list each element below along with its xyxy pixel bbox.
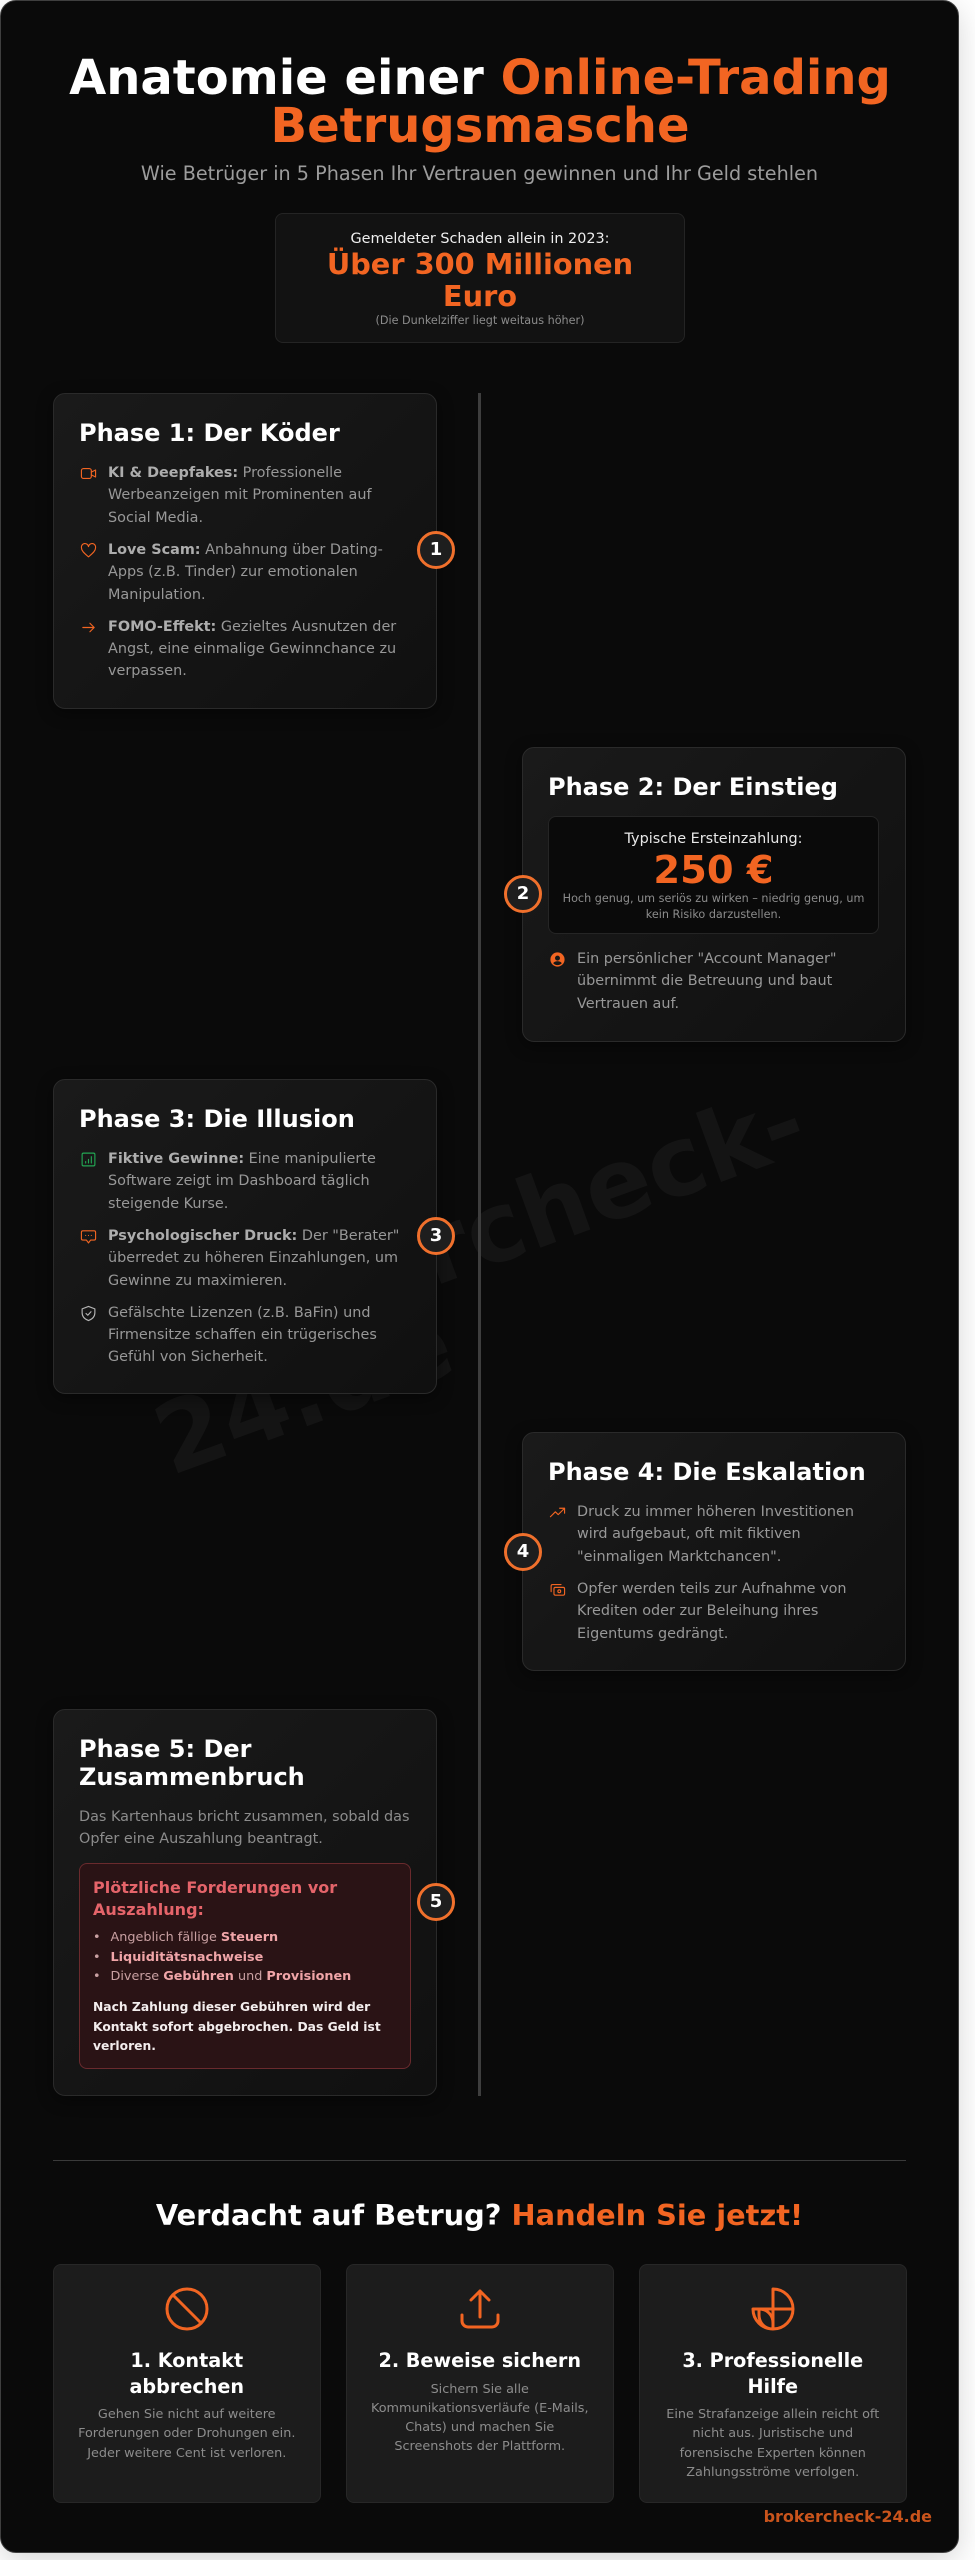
alert list: Liquiditätsnachweise [110,1950,263,1965]
icon: upload [460,2289,500,2328]
item: deepfakes: KI & Deepfakes: Professionelle Werbeanzeigen mit Prominenten auf Social Media. [108,465,372,526]
heading: phase 4: Phase 4: Die Eskalation [548,1458,866,1486]
deposit box: 250 € [653,848,774,893]
stat box: reported damage: Euro [443,278,517,312]
action 1 heading: 1. Kontakt abbrechen [129,2349,244,2398]
item: fake licences: Gefälschte Lizenzen (z.B. BaFin) und Firmensitze schaffen ein trügerisches Gefühl von Sicherheit. [108,1305,377,1365]
alert list: Diverse Gebühren und Provisionen [110,1969,351,1984]
title: Anatomie einer Online-Trading Betrugsmasche [69,50,891,154]
item: fictive profits: Fiktive Gewinne: Eine manipulierte Software zeigt im Dashboard täglich steigende Kurse. [108,1151,376,1212]
text: collapse: Das Kartenhaus bricht zusammen, sobald das Opfer eine Auszahlung beantragt. [79,1809,410,1847]
heading: phase 3: Phase 3: Die Illusion [79,1105,355,1133]
item: fomo: FOMO-Effekt: Gezieltes Ausnutzen der Angst, eine einmalige Gewinnchance zu verpassen. [108,619,396,679]
icon: pie [752,2288,794,2330]
panel: phase 1 [53,393,437,709]
heading: call to action: Verdacht auf Betrug? Handeln Sie jetzt! [156,2198,803,2232]
action card 2 [346,2264,614,2503]
heading: phase 5 [79,1735,305,1791]
alert conclusion: Nach Zahlung dieser Gebühren wird der Kontakt sofort abgebrochen. Das Geld ist verloren. [93,2000,381,2053]
alert list: Angeblich fällige Steuern [110,1930,278,1945]
stat box: reported damage: Über 300 Millionen [327,247,633,281]
stat box: reported damage: (Die Dunkelziffer liegt weitaus höher) [376,314,584,327]
item: loans: Opfer werden teils zur Aufnahme von Krediten oder zur Beleihung ihres Eigentums gedrängt. [577,1581,847,1642]
badge 3: 3 [430,1225,442,1246]
deposit box [548,816,879,934]
badge 3 [417,1217,455,1255]
badge 2: 2 [517,883,529,904]
footer brand: brokercheck-24.de [764,2507,932,2526]
panel: phase 2 [522,747,906,1042]
panel: phase 4 [522,1432,906,1671]
deposit box: kein Risiko darzustellen. [646,908,781,921]
item: love scam: Love Scam: Anbahnung über Dating-Apps (z.B. Tinder) zur emotionalen Manipulation. [108,542,383,603]
alert heading: Plötzliche Forderungen vor Auszahlung: [93,1878,337,1919]
watermark: brokercheck- [110,1064,820,1415]
item: account manager: Ein persönlicher "Account Manager" übernimmt die Betreuung und baut Vertrauen auf. [577,951,836,1012]
badge 4: 4 [517,1541,529,1562]
heading: phase 2: Phase 2: Der Einstieg [548,773,838,801]
panel: phase 5 [53,1709,437,2096]
heading: phase 5: Phase 5: Der [79,1735,251,1763]
alert box [79,1863,411,2069]
badge 2 [504,875,542,913]
timeline line [478,393,481,2096]
panel: phase 3 [53,1079,437,1394]
badge 4 [504,1533,542,1571]
badge 1: 1 [430,539,442,560]
badge 1 [417,531,455,569]
subtitle: Wie Betrüger in 5 Phasen Ihr Vertrauen gewinnen und Ihr Geld stehlen [141,162,818,185]
action 2 heading: 2. Beweise sichern [378,2349,581,2372]
item: pressure: Druck zu immer höheren Investitionen wird aufgebaut, oft mit fiktiven "einmaligen Marktchancen". [577,1504,854,1565]
heading: phase 5: Zusammenbruch [79,1763,305,1791]
stat box: reported damage [275,213,685,343]
watermark: 24.de [140,1286,467,1497]
heading: phase 1: Phase 1: Der Köder [79,419,340,447]
icon: ban [166,2288,208,2330]
stat box: reported damage: Gemeldeter Schaden allein in 2023: [350,231,610,247]
action 3 text: Eine Strafanzeige allein reicht oft nicht aus. Juristische und forensische Experten können Zahlungsströme verfolgen. [666,2407,879,2480]
action 2 text: Sichern Sie alle Kommunikationsverläufe (E-Mails, Chats) und machen Sie Screenshots der Plattform. [371,2382,589,2454]
deposit box: Hoch genug, um seriös zu wirken – niedrig genug, um [563,892,864,905]
deposit box: Typische Ersteinzahlung: [624,831,802,847]
action card 3 [639,2264,906,2503]
badge 5 [417,1883,455,1921]
alert list [94,1930,351,1984]
item: psychological pressure: Psychologischer Druck: Der "Berater" überredet zu höheren Einzahlungen, um Gewinne zu maximieren. [108,1228,399,1289]
action 3 heading: 3. Professionelle Hilfe [682,2349,863,2398]
badge 5: 5 [430,1891,442,1912]
action card 1 [53,2264,320,2503]
action 1 text: Gehen Sie nicht auf weitere Forderungen oder Drohungen ein. Jeder weitere Cent ist verloren. [78,2407,295,2461]
